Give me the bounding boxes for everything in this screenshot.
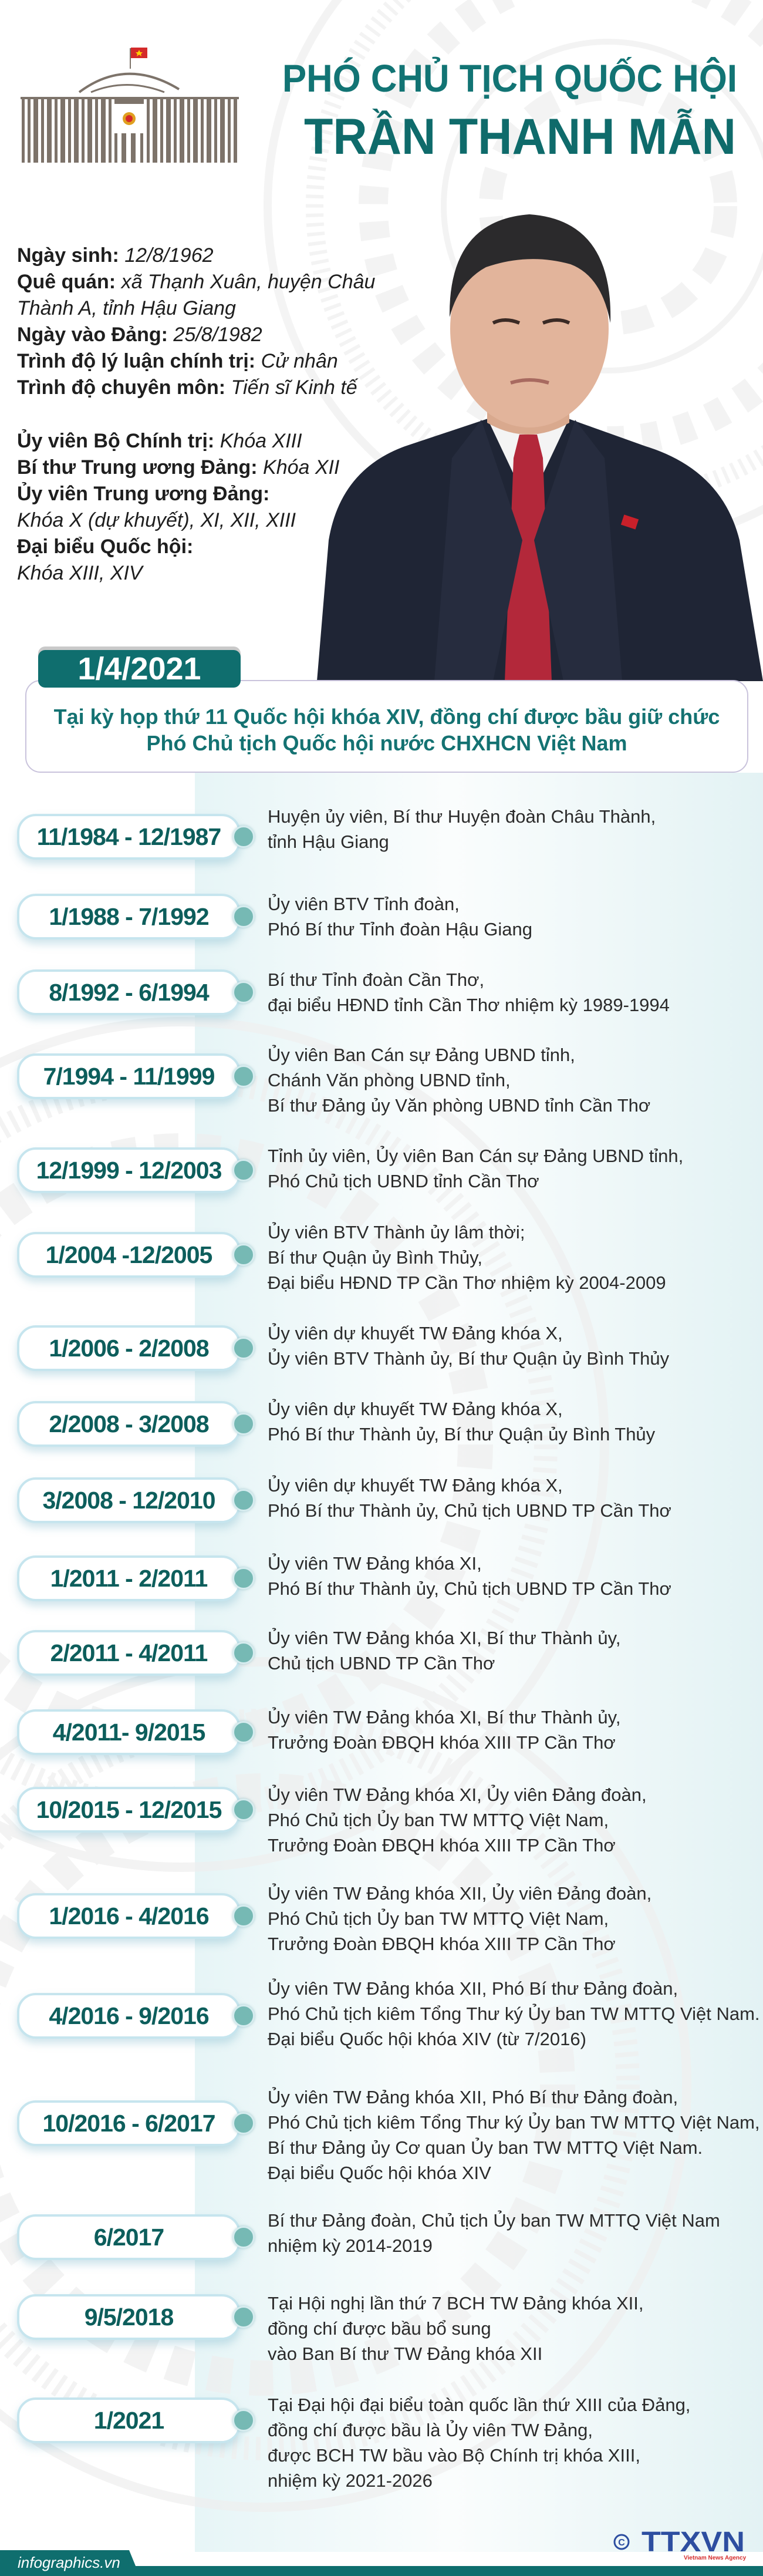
timeline item: 3/2008: 3/2008 - 12/2010 bbox=[42, 1487, 215, 1514]
timeline item: 12/1999 bbox=[13, 1146, 683, 1201]
icon: national assembly building bbox=[21, 48, 239, 163]
timeline item: 7/1994 bbox=[13, 1045, 650, 1116]
party positions block: Khóa XIII, XIV bbox=[17, 562, 143, 584]
callout text box: Phó Chủ tịch Quốc hội nước CHXHCN Việt Nam bbox=[146, 731, 627, 755]
background: teal gradient panel bbox=[195, 773, 763, 2552]
timeline item: 4/2011 bbox=[13, 1707, 620, 1764]
text: vào Ban Bí thư TW Đảng khóa XII bbox=[268, 2343, 542, 2364]
timeline item: 2/2011: Ủy viên TW Đảng khóa XI, Bí thư Thành ủy, bbox=[268, 1628, 620, 1648]
timeline item: 3/2008: Ủy viên dự khuyết TW Đảng khóa X, bbox=[268, 1475, 563, 1496]
timeline item: 10/2015 bbox=[13, 1784, 647, 1856]
timeline item: 10/2015: Ủy viên TW Đảng khóa XI, Ủy viên Đảng đoàn, bbox=[268, 1784, 647, 1805]
party positions block: Khóa X (dự khuyết), XI, XII, XIII bbox=[17, 509, 296, 531]
timeline item: 1/2004 bbox=[13, 1222, 666, 1293]
timeline item: 4/2016 bbox=[13, 1978, 760, 2049]
timeline item: 10/2015: Phó Chủ tịch Ủy ban TW MTTQ Việt Nam, bbox=[268, 1810, 609, 1830]
timeline item: 3/2008: Phó Bí thư Thành ủy, Chủ tịch UBND TP Cần Thơ bbox=[268, 1500, 671, 1521]
party positions block: Ủy viên Bộ Chính trị: Khóa XIII bbox=[17, 430, 302, 452]
timeline item: 1/2011: Phó Bí thư Thành ủy, Chủ tịch UBND TP Cần Thơ bbox=[268, 1578, 671, 1599]
text: Đại biểu HĐND TP Cần Thơ nhiệm kỳ 2004-2009 bbox=[268, 1272, 666, 1293]
timeline item: 4/2011: Ủy viên TW Đảng khóa XI, Bí thư Thành ủy, bbox=[268, 1707, 620, 1728]
timeline item: 1/1988: 1/1988 - 7/1992 bbox=[49, 903, 209, 930]
title bbox=[282, 56, 737, 164]
timeline item: 9/5/2018 bbox=[13, 2293, 643, 2364]
timeline item: 4/2016: Phó Chủ tịch kiêm Tổng Thư ký Ủy ban TW MTTQ Việt Nam. bbox=[268, 2003, 760, 2024]
personal info block: Trình độ chuyên môn: Tiến sĩ Kinh tế bbox=[17, 376, 357, 399]
timeline item: 1/2011: 1/2011 - 2/2011 bbox=[50, 1564, 207, 1591]
timeline item: 1/2021: đồng chí được bầu là Ủy viên TW Đảng, bbox=[268, 2420, 593, 2440]
timeline item: 2/2008 bbox=[13, 1399, 655, 1455]
timeline item: 7/1994: 7/1994 - 11/1999 bbox=[43, 1063, 214, 1090]
text: Trưởng Đoàn ĐBQH khóa XIII TP Cần Thơ bbox=[268, 1835, 616, 1856]
timeline item: 1/2006 bbox=[13, 1323, 669, 1380]
personal info block: Trình độ lý luận chính trị: Cử nhân bbox=[17, 350, 338, 372]
timeline item: 2/2008: Phó Bí thư Thành ủy, Bí thư Quận ủy Bình Thủy bbox=[268, 1424, 655, 1444]
party positions block: Đại biểu Quốc hội: bbox=[17, 536, 193, 558]
timeline item: 2/2008: Ủy viên dự khuyết TW Đảng khóa X, bbox=[268, 1399, 563, 1419]
timeline item: 4/2011: 4/2011- 9/2015 bbox=[53, 1718, 205, 1745]
timeline item: 10/2016 bbox=[13, 2087, 760, 2183]
timeline item: 1/2004: Ủy viên BTV Thành ủy lâm thời; bbox=[268, 1222, 525, 1242]
timeline item: 7/1994: Ủy viên Ban Cán sự Đảng UBND tỉnh, bbox=[268, 1045, 575, 1065]
timeline item: 2/2011 bbox=[13, 1628, 620, 1684]
text: Ủy viên TW Đảng khóa XII, Phó Bí thư Đảng đoàn, bbox=[268, 1978, 678, 1999]
party positions block bbox=[17, 429, 339, 584]
timeline item: 1/2021: Tại Đại hội đại biểu toàn quốc lần thứ XIII của Đảng, bbox=[268, 2395, 690, 2415]
party positions block: Ủy viên Trung ương Đảng: bbox=[17, 483, 269, 505]
timeline item: 6/2017: 6/2017 bbox=[94, 2223, 164, 2250]
timeline item: 11/1984: tỉnh Hậu Giang bbox=[268, 831, 389, 852]
timeline item: 10/2015: 10/2015 - 12/2015 bbox=[36, 1796, 221, 1823]
date badge: 1/4/2021 bbox=[77, 651, 201, 686]
text: Ủy viên TW Đảng khóa XII, Phó Bí thư Đảng đoàn, bbox=[268, 2087, 678, 2107]
text: Đại biểu Quốc hội khóa XIV bbox=[268, 2163, 491, 2183]
timeline item: 12/1999: Phó Chủ tịch UBND tỉnh Cần Thơ bbox=[268, 1171, 539, 1191]
personal info block: Ngày vào Đảng: 25/8/1982 bbox=[17, 324, 262, 346]
timeline item: 1/2006: 1/2006 - 2/2008 bbox=[49, 1334, 209, 1361]
timeline item: 8/1992: đại biểu HĐND tỉnh Cần Thơ nhiệm kỳ 1989-1994 bbox=[268, 995, 670, 1015]
timeline item: 1/2016 bbox=[13, 1883, 651, 1954]
timeline item: 1/2006: Ủy viên BTV Thành ủy, Bí thư Quận ủy Bình Thủy bbox=[268, 1348, 669, 1369]
timeline item: 10/2016: 10/2016 - 6/2017 bbox=[42, 2109, 215, 2136]
timeline item: 1/2004: Bí thư Quận ủy Bình Thủy, bbox=[268, 1247, 482, 1268]
timeline item: 1/2004: 1/2004 -12/2005 bbox=[46, 1241, 212, 1268]
date badge bbox=[38, 650, 241, 688]
timeline item: 8/1992: 8/1992 - 6/1994 bbox=[49, 978, 209, 1005]
footer band bbox=[0, 2550, 763, 2576]
timeline item: 1/1988 bbox=[13, 894, 532, 948]
timeline item: 1/1988: Ủy viên BTV Tỉnh đoàn, bbox=[268, 894, 460, 914]
timeline item: 1/2016: Ủy viên TW Đảng khóa XII, Ủy viên Đảng đoàn, bbox=[268, 1883, 651, 1904]
timeline item: 2/2011: Chủ tịch UBND TP Cần Thơ bbox=[268, 1653, 495, 1673]
timeline item: 8/1992 bbox=[13, 969, 670, 1024]
timeline item: 1/2016: 1/2016 - 4/2016 bbox=[49, 1902, 209, 1930]
timeline item: 1/2006: Ủy viên dự khuyết TW Đảng khóa X, bbox=[268, 1323, 563, 1343]
portrait illustration bbox=[317, 214, 763, 681]
footer tab: infographics.vn bbox=[0, 2550, 136, 2571]
timeline item: 1/2011: Ủy viên TW Đảng khóa XI, bbox=[268, 1553, 482, 1574]
timeline item: 12/1999: 12/1999 - 12/2003 bbox=[36, 1157, 221, 1184]
personal info block bbox=[17, 244, 375, 399]
timeline item: 9/5/2018: 9/5/2018 bbox=[85, 2303, 173, 2330]
party positions block: Bí thư Trung ương Đảng: Khóa XII bbox=[17, 456, 339, 479]
timeline item: 3/2008 bbox=[13, 1475, 671, 1531]
timeline item: 6/2017: nhiệm kỳ 2014-2019 bbox=[268, 2235, 433, 2256]
timeline item: 11/1984 bbox=[13, 806, 656, 868]
timeline item: 9/5/2018: đồng chí được bầu bổ sung bbox=[268, 2318, 491, 2339]
personal info block: Ngày sinh: 12/8/1962 bbox=[17, 244, 214, 267]
timeline item: 9/5/2018: Tại Hội nghị lần thứ 7 BCH TW Đảng khóa XII, bbox=[268, 2293, 643, 2314]
timeline item: 1/2011 bbox=[13, 1553, 671, 1610]
timeline item: 1/2021: 1/2021 bbox=[94, 2406, 164, 2433]
timeline item: 2/2008: 2/2008 - 3/2008 bbox=[49, 1410, 209, 1437]
timeline item: 11/1984: Huyện ủy viên, Bí thư Huyện đoàn Châu Thành, bbox=[268, 806, 656, 827]
callout text box: Tại kỳ họp thứ 11 Quốc hội khóa XIV, đồng chí được bầu giữ chức bbox=[54, 705, 720, 729]
timeline item: 7/1994: Chánh Văn phòng UBND tỉnh, bbox=[268, 1070, 511, 1090]
timeline item: 8/1992: Bí thư Tỉnh đoàn Cần Thơ, bbox=[268, 969, 484, 990]
timeline item: 1/1988: Phó Bí thư Tỉnh đoàn Hậu Giang bbox=[268, 919, 532, 940]
logo: TTXVN: C bbox=[618, 2538, 625, 2548]
timeline item: 4/2016: 4/2016 - 9/2016 bbox=[49, 2002, 209, 2029]
text: Bí thư Đảng ủy Văn phòng UBND tỉnh Cần Thơ bbox=[268, 1095, 650, 1116]
timeline item: 10/2016: Phó Chủ tịch kiêm Tổng Thư ký Ủy ban TW MTTQ Việt Nam, bbox=[268, 2112, 760, 2133]
timeline item: 12/1999: Tỉnh ủy viên, Ủy viên Ban Cán sự Đảng UBND tỉnh, bbox=[268, 1146, 683, 1166]
timeline item: 4/2011: Trưởng Đoàn ĐBQH khóa XIII TP Cần Thơ bbox=[268, 1732, 616, 1753]
logo: TTXVN bbox=[614, 2527, 747, 2561]
text: được BCH TW bầu vào Bộ Chính trị khóa XIII, bbox=[268, 2445, 640, 2466]
callout: 1/4/2021 highlight box bbox=[25, 646, 748, 773]
logo: TTXVN: TTXVN bbox=[642, 2527, 745, 2558]
text: Đại biểu Quốc hội khóa XIV (từ 7/2016) bbox=[268, 2029, 586, 2049]
timeline item: 11/1984: 11/1984 - 12/1987 bbox=[37, 823, 221, 850]
timeline item: 2/2011: 2/2011 - 4/2011 bbox=[50, 1639, 207, 1666]
timeline item: 6/2017 bbox=[13, 2210, 720, 2269]
timeline item: 1/2021 bbox=[13, 2395, 690, 2491]
text: Bí thư Đảng ủy Cơ quan Ủy ban TW MTTQ Việt Nam. bbox=[268, 2137, 703, 2158]
text: Trưởng Đoàn ĐBQH khóa XIII TP Cần Thơ bbox=[268, 1934, 616, 1954]
timeline item: 6/2017: Bí thư Đảng đoàn, Chủ tịch Ủy ban TW MTTQ Việt Nam bbox=[268, 2210, 720, 2231]
logo: TTXVN: Vietnam News Agency bbox=[684, 2555, 747, 2561]
personal info block: Thành A, tỉnh Hậu Giang bbox=[17, 297, 236, 319]
personal info block: Quê quán: xã Thạnh Xuân, huyện Châu bbox=[17, 271, 375, 293]
text: nhiệm kỳ 2021-2026 bbox=[268, 2470, 433, 2491]
footer tab: infographics.vn: infographics.vn bbox=[18, 2554, 120, 2571]
timeline item: 1/2016: Phó Chủ tịch Ủy ban TW MTTQ Việt Nam, bbox=[268, 1908, 609, 1929]
callout text box bbox=[25, 680, 748, 773]
